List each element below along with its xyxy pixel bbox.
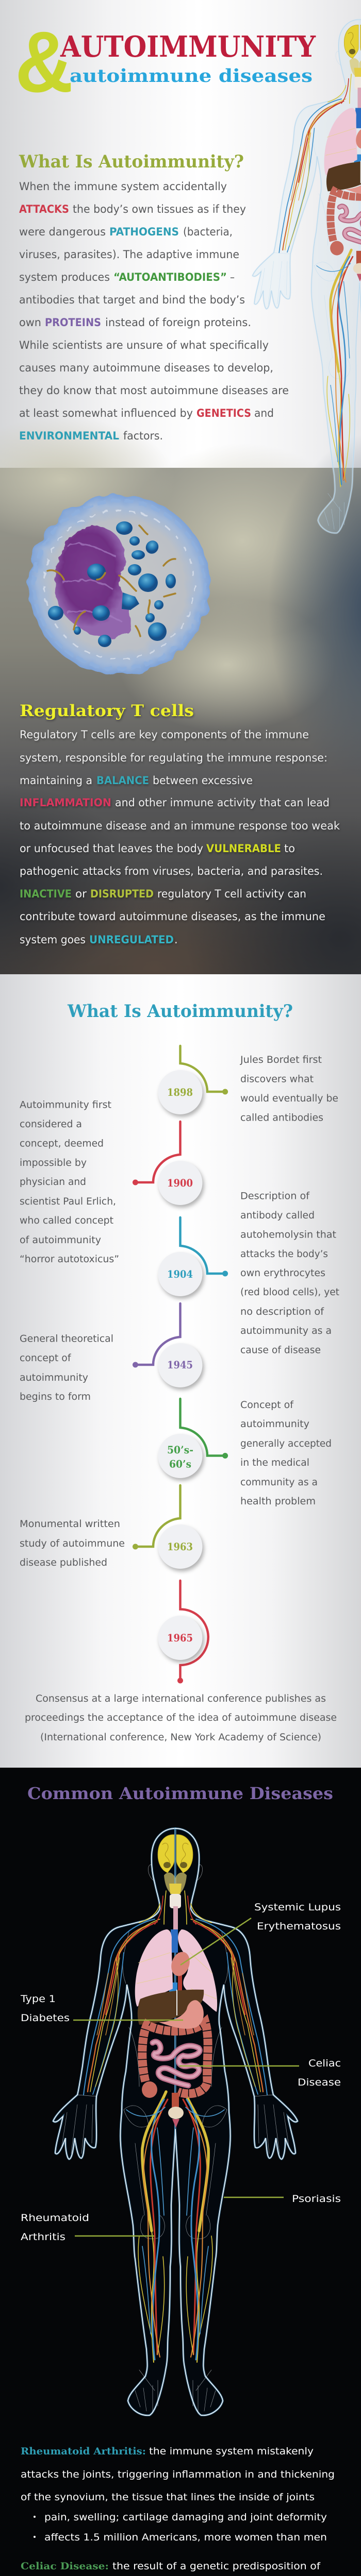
- text block: autoimmunity definition: When the immune system accidentally: [19, 180, 227, 193]
- text block: regulatory T cells description: contribute toward autoimmune diseases, as the immune: [20, 910, 325, 923]
- callout: Celiac Disease: [179, 2058, 341, 2088]
- timeline item: 50's-60's: [158, 1399, 228, 1478]
- timeline text: 50's-60's: health problem: [240, 1496, 316, 1507]
- text block: autoimmunity definition: they do know that most autoimmune diseases are: [19, 384, 289, 397]
- text block: Rheumatoid Arthritis: of the synovium, the tissue that lines the inside of joints: [21, 2492, 315, 2503]
- timeline text: 1904: cause of disease: [240, 1345, 321, 1356]
- timeline item: 1900: [133, 1122, 202, 1205]
- timeline text: 1904: own erythrocytes: [240, 1268, 325, 1279]
- timeline text: 1898: discovers what: [240, 1074, 314, 1085]
- text block: regulatory T cells description: UNREGULATED: [89, 934, 174, 946]
- timeline text: 1904: autoimmunity as a: [240, 1326, 332, 1336]
- timeline text: 1904: Description of: [240, 1191, 310, 1201]
- timeline item: 1963: 1963: [167, 1540, 193, 1553]
- text block: Rheumatoid Arthritis: Rheumatoid Arthritis:: [21, 2446, 146, 2457]
- illustration: immune cell: [28, 495, 210, 674]
- text block: autoimmunity definition: GENETICS: [196, 407, 251, 419]
- timeline text: 1965 consensus: proceedings the acceptance of the idea of autoimmune disease: [25, 1713, 337, 1723]
- timeline text: 1900: who called concept: [20, 1215, 113, 1226]
- text block: regulatory T cells description: INFLAMMATION: [20, 796, 111, 809]
- timeline item: 1945: 1945: [167, 1359, 193, 1371]
- callout: Type 1 Diabetes: Type 1: [20, 1993, 56, 2005]
- callout: Celiac Disease: Celiac: [308, 2058, 341, 2069]
- timeline text: 50's-60's: autoimmunity: [240, 1419, 309, 1430]
- text block: autoimmunity definition: ATTACKS: [19, 203, 69, 215]
- timeline text: 1900: considered a: [20, 1119, 82, 1130]
- text block: Rheumatoid Arthritis: affects 1.5 million Americans, more women than men: [44, 2532, 327, 2543]
- text block: autoimmunity definition: While scientists are unsure of what specifically: [19, 339, 269, 351]
- text block: regulatory T cells description: VULNERABLE: [206, 842, 281, 855]
- timeline text: 1904: attacks the body’s: [240, 1249, 328, 1260]
- timeline text: 1904: no description of: [240, 1307, 324, 1317]
- text block: autoimmunity definition: instead of foreign proteins.: [105, 316, 251, 329]
- text block: autoimmunity definition: ENVIRONMENTAL: [19, 430, 119, 442]
- callout: Rheumatoid Arthritis: [21, 2212, 154, 2243]
- text block: autoimmunity definition: were dangerous: [19, 226, 106, 238]
- text block: regulatory T cells description: pathogenic attacks from viruses, bacteria, and parasites.: [20, 865, 323, 877]
- timeline item: 1904: [158, 1217, 228, 1296]
- callout: Systemic Lupus Erythematosus: Systemic Lupus: [254, 1902, 341, 1913]
- timeline text: 1963: disease published: [20, 1557, 107, 1568]
- timeline text: 1945: concept of: [20, 1353, 71, 1364]
- timeline text: 1900: impossible by: [20, 1158, 87, 1168]
- panel: intro background: [0, 0, 361, 468]
- text block: Rheumatoid Arthritis: the immune system mistakenly: [149, 2446, 314, 2457]
- text block: autoimmunity definition: –: [230, 271, 235, 283]
- text block: regulatory T cells description: to: [284, 842, 295, 855]
- timeline item: 50's-60's: 60’s: [169, 1458, 191, 1470]
- text block: autoimmunity definition: (bacteria,: [183, 226, 233, 238]
- panel: timeline background: [0, 974, 361, 1768]
- text block: regulatory T cells description: DISRUPTED: [90, 888, 154, 900]
- text block: autoimmunity definition: the body’s own tissues as if they: [73, 203, 246, 215]
- timeline text: 1898: [240, 1055, 338, 1123]
- timeline text: 50's-60's: [240, 1400, 332, 1507]
- text block: regulatory T cells description: regulatory T cell activity can: [157, 888, 306, 900]
- title: ampersand: &: [15, 13, 73, 110]
- text block: Rheumatoid Arthritis: pain, swelling; cartilage damaging and joint deformity: [44, 2512, 327, 2523]
- timeline text: 1898: would eventually be: [240, 1093, 338, 1104]
- text block: autoimmunity definition: viruses, parasites). The adaptive immune: [19, 248, 239, 261]
- timeline item: 1945: [133, 1303, 202, 1387]
- timeline text: 1963: study of autoimmune: [20, 1538, 125, 1549]
- timeline text: 1904: [240, 1191, 339, 1356]
- timeline text: 1900: of autoimmunity: [20, 1235, 101, 1246]
- timeline text: 1945: begins to form: [20, 1392, 91, 1402]
- text block: Celiac Disease: [21, 2561, 321, 2576]
- timeline text: 1898: Jules Bordet first: [240, 1055, 322, 1065]
- illustration: full human body anatomy: [53, 1828, 298, 2415]
- text block: Celiac Disease: Celiac Disease:: [21, 2561, 109, 2572]
- text block: autoimmunity definition: at least somewhat influenced by: [19, 407, 193, 419]
- text block: regulatory T cells description: or: [75, 888, 87, 900]
- text block: regulatory T cells description: or unfocused that leaves the body: [20, 842, 203, 855]
- callout: Rheumatoid Arthritis: Arthritis: [21, 2231, 65, 2243]
- timeline text: 50's-60's: Concept of: [240, 1400, 293, 1411]
- text block: autoimmunity definition: PROTEINS: [45, 316, 101, 329]
- text block: autoimmunity definition: factors.: [123, 430, 163, 442]
- panel: regulatory T cells background: [0, 417, 361, 1066]
- text block: Celiac Disease: the result of a genetic predisposition of: [112, 2561, 321, 2572]
- text block: regulatory T cells description: .: [174, 934, 178, 946]
- text block: autoimmunity definition: own: [19, 316, 41, 329]
- timeline text: 1945: autoimmunity: [20, 1372, 88, 1383]
- title: AUTOIMMUNITY: AUTOIMMUNITY: [60, 30, 316, 64]
- timeline text: 1900: concept, deemed: [20, 1139, 104, 1149]
- timeline text: 50's-60's: generally accepted: [240, 1438, 332, 1449]
- text block: regulatory T cells description: maintaining a: [20, 774, 92, 787]
- timeline text: 1898: called antibodies: [240, 1113, 323, 1123]
- timeline item: 1898: 1898: [167, 1086, 193, 1098]
- timeline item: 1963: [133, 1485, 202, 1569]
- timeline text: 1900: Autoimmunity first: [20, 1099, 111, 1111]
- text block: regulatory T cells description: [20, 728, 340, 946]
- timeline text: 1965 consensus: [25, 1693, 337, 1743]
- text block: autoimmunity definition: PATHOGENS: [109, 226, 179, 238]
- timeline text: 1963: [20, 1519, 125, 1568]
- text block: regulatory T cells description: Regulatory T cells are key components of the immune: [20, 728, 309, 741]
- heading: What Is Autoimmunity?: What Is Autoimmunity?: [19, 151, 244, 172]
- timeline item: 1904: 1904: [167, 1268, 193, 1280]
- timeline item: 1965: 1965: [167, 1632, 193, 1644]
- callout: Type 1 Diabetes: Diabetes: [21, 2012, 70, 2024]
- callout: Systemic Lupus Erythematosus: [180, 1902, 341, 1965]
- timeline item: 1898: [158, 1046, 228, 1114]
- heading: Regulatory T cells: Regulatory T cells: [20, 702, 194, 720]
- text block: regulatory T cells description: BALANCE: [96, 774, 149, 787]
- text block: regulatory T cells description: between excessive: [153, 774, 253, 787]
- text block: Rheumatoid Arthritis: attacks the joints, triggering inflammation in and thickening: [21, 2469, 335, 2480]
- text block: regulatory T cells description: to autoimmune disease and an immune response too weak: [20, 820, 340, 832]
- heading: timeline What Is Autoimmunity?: What Is Autoimmunity?: [67, 1001, 293, 1022]
- timeline text: 50's-60's: community as a: [240, 1477, 318, 1488]
- timeline text: 1904: (red blood cells), yet: [240, 1287, 339, 1298]
- timeline text: 50's-60's: in the medical: [240, 1458, 309, 1468]
- timeline text: 1945: General theoretical: [20, 1333, 113, 1345]
- icon: translucent human body, cropped at right edge: [253, 20, 361, 533]
- text block: regulatory T cells description: system, responsible for regulating the immune response:: [20, 752, 327, 764]
- text block: regulatory T cells description: and other immune activity that can lead: [115, 796, 330, 809]
- text block: autoimmunity definition: [19, 180, 289, 442]
- timeline text: 1965 consensus: Consensus at a large international conference publishes as: [36, 1693, 326, 1704]
- heading: Common Autoimmune Diseases: Common Autoimmune Diseases: [27, 1784, 333, 1803]
- timeline item: 1900: 1900: [167, 1177, 193, 1189]
- text block: autoimmunity definition: antibodies that target and bind the body’s: [19, 294, 245, 306]
- timeline text: 1963: Monumental written: [20, 1519, 120, 1530]
- text block: autoimmunity definition: causes many autoimmune diseases to develop,: [19, 362, 273, 374]
- timeline item: 1965: [158, 1581, 208, 1684]
- text block: regulatory T cells description: INACTIVE: [20, 888, 72, 900]
- timeline text: 1965 consensus: (International conference, New York Academy of Science): [40, 1732, 321, 1743]
- callout: Celiac Disease: Disease: [298, 2077, 341, 2088]
- timeline text: 1900: “horror autotoxicus”: [20, 1254, 119, 1265]
- text block: regulatory T cells description: system goes: [20, 934, 86, 946]
- text block: autoimmunity definition: system produces: [19, 271, 110, 283]
- panel: common diseases background: [0, 1768, 361, 2576]
- text block: Rheumatoid Arthritis: [21, 2446, 335, 2543]
- callout: Type 1 Diabetes: [20, 1993, 183, 2024]
- text block: autoimmunity definition: and: [254, 407, 274, 419]
- callout: Rheumatoid Arthritis: Rheumatoid: [21, 2212, 89, 2224]
- callout: Systemic Lupus Erythematosus: Erythematosus: [257, 1921, 341, 1932]
- timeline text: 1904: autohemolysin that: [240, 1229, 336, 1241]
- timeline text: 1900: [20, 1099, 119, 1265]
- subtitle: autoimmune diseases: autoimmune diseases: [70, 65, 313, 87]
- timeline text: 1900: physician and: [20, 1177, 86, 1188]
- text block: autoimmunity definition: “AUTOANTIBODIES”: [113, 271, 227, 283]
- timeline text: 1904: antibody called: [240, 1210, 315, 1221]
- timeline text: 1945: [20, 1333, 113, 1402]
- timeline item: 50's-60's: 50’s-: [167, 1444, 193, 1456]
- timeline text: 1900: scientist Paul Erlich,: [20, 1196, 116, 1207]
- callout: Psoriasis: Psoriasis: [292, 2193, 341, 2205]
